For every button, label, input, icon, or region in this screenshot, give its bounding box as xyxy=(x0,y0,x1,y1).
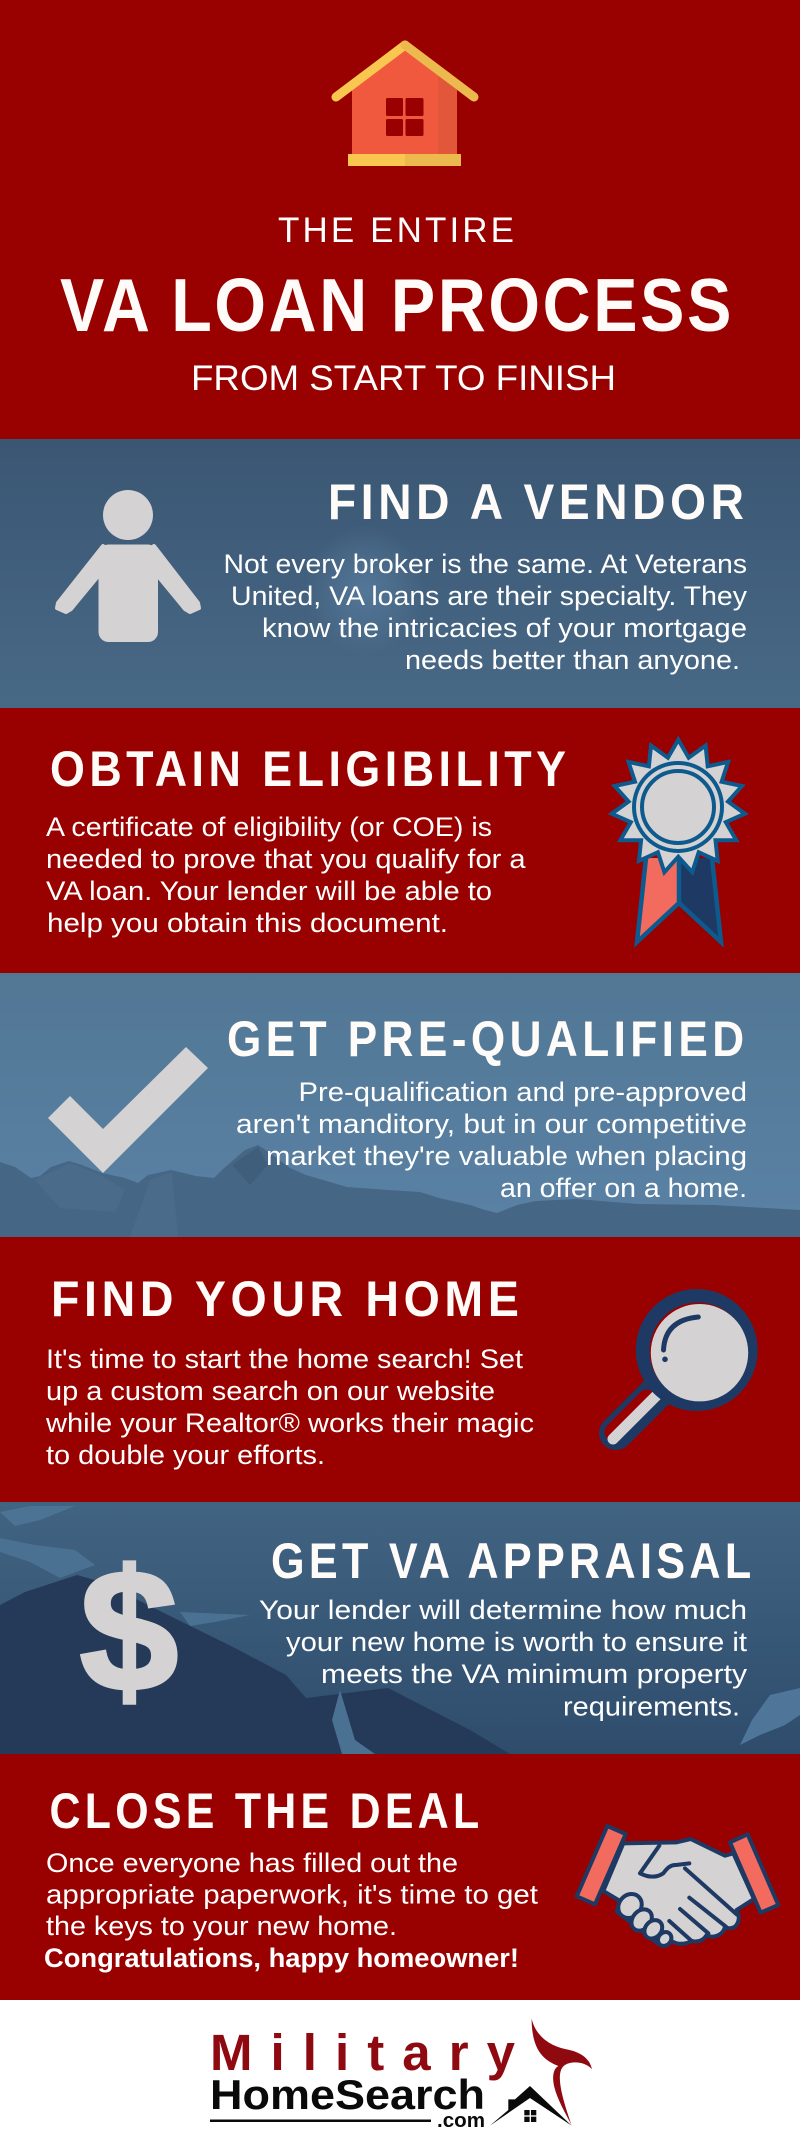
body text: Your lender will determine how much xyxy=(259,1595,747,1625)
logo word: .com: .com xyxy=(437,2110,485,2132)
body text: It's time to start the home search! Set xyxy=(46,1344,524,1374)
body text xyxy=(236,1077,747,1203)
logo word: HomeSearch: HomeSearch xyxy=(210,2071,485,2118)
body text: Not every broker is the same. At Veterans xyxy=(224,549,747,579)
body text: up a custom search on our website xyxy=(46,1376,495,1406)
body text: VA loan. Your lender will be able to xyxy=(46,876,492,906)
body text: market they're valuable when placing xyxy=(266,1141,747,1171)
logo mark: eagle and roof xyxy=(490,2018,592,2126)
body text: to double your efforts. xyxy=(46,1440,325,1470)
icon: check mark xyxy=(48,1047,208,1173)
panel: get pre-qualified xyxy=(0,973,800,1237)
body text xyxy=(45,1344,534,1470)
icon: person xyxy=(57,490,199,642)
icon: magnifying glass xyxy=(613,1289,758,1439)
panel: footer logo xyxy=(0,2000,800,2150)
panel: find your home xyxy=(0,1237,800,1502)
body text xyxy=(46,812,527,938)
body text: United, VA loans are their specialty. They xyxy=(231,581,748,611)
title: VA loan process: VA LOAN PROCESS xyxy=(60,263,734,347)
panel: obtain eligibility xyxy=(0,708,800,973)
body text: needs better than anyone. xyxy=(405,645,740,675)
body text: needed to prove that you qualify for a xyxy=(46,844,527,874)
body text: requirements. xyxy=(563,1692,740,1722)
title line: the entire: THE ENTIRE xyxy=(278,211,514,250)
body text: an offer on a home. xyxy=(500,1173,747,1203)
icon: handshake xyxy=(577,1826,778,1949)
body text: the keys to your new home. xyxy=(46,1911,397,1941)
heading: GET PRE-QUALIFIED xyxy=(227,1011,748,1067)
heading: FIND A VENDOR xyxy=(328,474,748,530)
panel: close the deal xyxy=(0,1754,800,2000)
icon: house xyxy=(336,45,474,166)
body text: your new home is worth to ensure it xyxy=(286,1627,748,1657)
title line: from start to finish: FROM START TO FINISH xyxy=(191,359,616,398)
body text xyxy=(224,549,748,675)
heading: OBTAIN ELIGIBILITY xyxy=(50,741,570,797)
body text: Pre-qualification and pre-approved xyxy=(298,1077,747,1107)
panel: find a vendor xyxy=(0,439,800,708)
body text: appropriate paperwork, it's time to get xyxy=(46,1880,539,1910)
body text: meets the VA minimum property xyxy=(321,1659,748,1689)
logo word: Military: Military xyxy=(210,2024,516,2081)
heading: CLOSE THE DEAL xyxy=(50,1783,484,1839)
body text: aren't manditory, but in our competitive xyxy=(236,1109,747,1139)
panel: get VA appraisal xyxy=(0,1502,800,1754)
body text xyxy=(44,1848,539,1973)
body text xyxy=(259,1595,748,1722)
body text: Congratulations, happy homeowner! xyxy=(44,1943,519,1973)
icon: award ribbon xyxy=(612,740,745,942)
logo underline xyxy=(210,2120,431,2122)
body text: know the intricacies of your mortgage xyxy=(262,613,747,643)
heading: FIND YOUR HOME xyxy=(51,1271,524,1327)
panel: header xyxy=(0,0,800,439)
icon: dollar sign: $ xyxy=(80,1535,178,1727)
body text: help you obtain this document. xyxy=(47,908,448,938)
body text: while your Realtor® works their magic xyxy=(45,1408,534,1438)
body text: A certificate of eligibility (or COE) is xyxy=(46,812,492,842)
body text: Once everyone has filled out the xyxy=(46,1848,458,1878)
